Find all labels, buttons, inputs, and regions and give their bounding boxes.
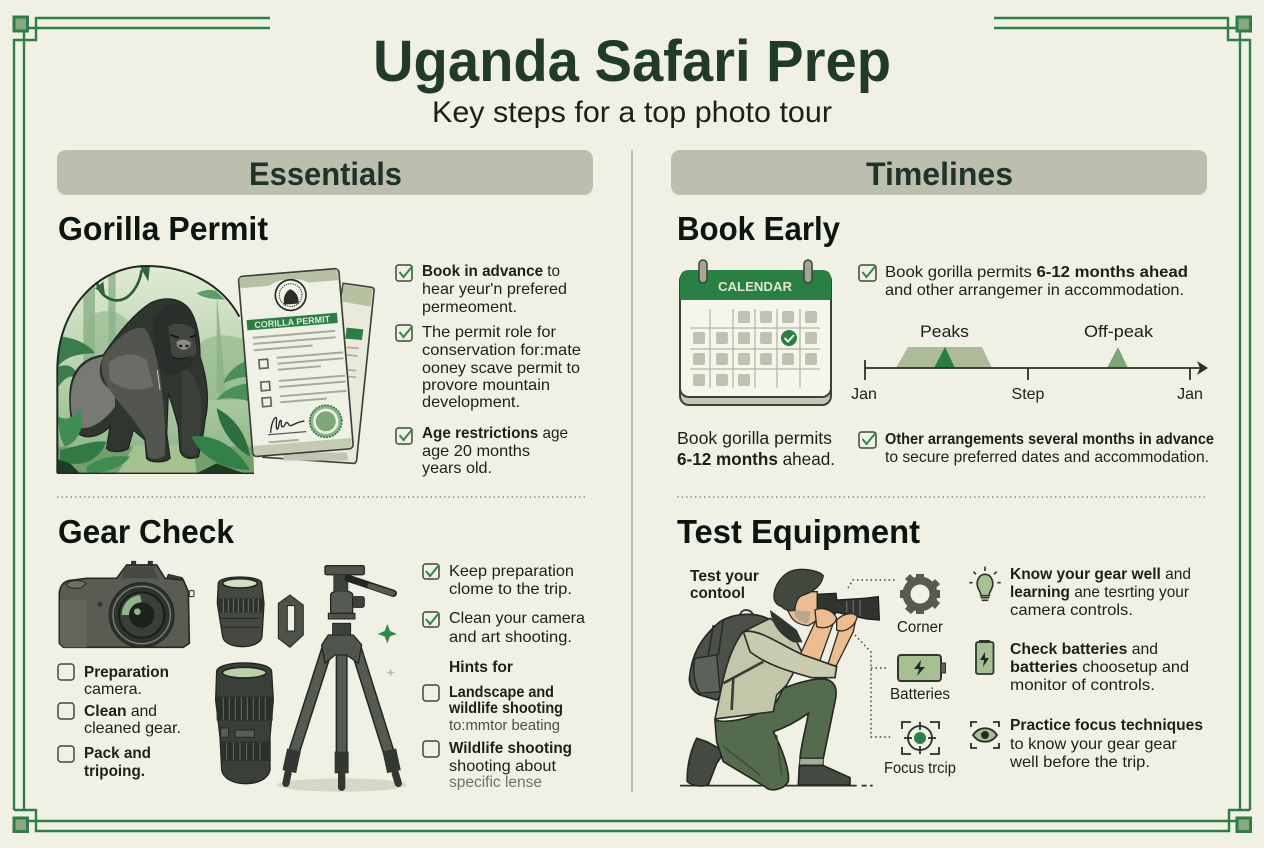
icon: focus target [902, 722, 939, 754]
sleeve [743, 631, 837, 678]
title: Uganda Safari Prep [373, 29, 891, 94]
item: permit role [396, 324, 581, 411]
checklist: gorilla permit [396, 263, 581, 477]
item: age restrictions: Age restrictions age [422, 425, 568, 442]
tip: know your gear: camera controls. [1010, 602, 1133, 619]
far forearm [827, 615, 857, 668]
label: corner: Corner [897, 619, 943, 636]
tip: check batteries: Check batteries and [1010, 641, 1158, 658]
item: clean gear [58, 703, 181, 737]
text: calendar caption: 6-12 months ahead. [677, 449, 835, 469]
illustration: gorilla in jungle arch [50, 260, 374, 480]
item: pack tripod [58, 745, 151, 780]
text: test your control: Test your [690, 568, 759, 585]
icon: calendar: CALENDAR [718, 279, 793, 294]
icon: battery [898, 655, 946, 681]
icon: grey sparkle [386, 668, 395, 677]
icon: battery upright [976, 640, 994, 674]
icon: green sparkle [378, 624, 397, 643]
item: pack tripod: tripoing. [84, 763, 145, 780]
text: book gorilla permits [859, 264, 1188, 299]
strap [770, 610, 803, 642]
chart: season timeline [851, 322, 1208, 403]
item: landscape and wildlife: wildlife shooting [448, 700, 563, 717]
icon: lens hood [278, 595, 303, 647]
tip: check batteries: batteries choosetup and [1010, 659, 1189, 676]
item: wildlife shooting: shooting about [449, 758, 557, 775]
text: other arrangements: to secure preferred dates and accommodation. [885, 449, 1209, 466]
tip: practice focus: to know your gear gear [1010, 736, 1178, 753]
text: book gorilla permits: and other arrangemer in accommodation. [885, 282, 1184, 299]
near forearm [800, 615, 835, 665]
chart: season timeline: Jan [851, 386, 877, 403]
head [785, 592, 817, 626]
tips: test equipment [969, 566, 1203, 771]
icon: short lens [217, 577, 264, 647]
tip: know your gear: learning ane tesrting your [1010, 584, 1190, 601]
front permit sheet [238, 268, 353, 457]
item: clean gear: Clean and [84, 703, 157, 720]
foreground leaves [58, 408, 82, 447]
item: permit role: provore mountain [422, 377, 550, 394]
gorilla body [70, 299, 207, 462]
item: preparation camera [58, 664, 169, 698]
front permit sheet: CORILLA PERMIT [254, 314, 331, 330]
item: wildlife shooting: Wildlife shooting [449, 740, 572, 757]
checklist: gear left [58, 664, 181, 780]
back permit sheet [263, 283, 374, 463]
torso [715, 618, 803, 719]
icon: telephoto lens [216, 663, 273, 784]
illustration: camera, lenses and tripod [59, 561, 407, 792]
icon: eye focus [971, 722, 999, 748]
item: permit role: ooney scave permit to [422, 360, 580, 377]
panel: essentials header: Essentials [249, 156, 402, 192]
checklist: gear right [423, 563, 585, 791]
tip: practice focus [1009, 717, 1203, 771]
text: test your control [690, 568, 759, 602]
tip: know your gear [1010, 566, 1191, 619]
item: clean gear: cleaned gear. [84, 720, 181, 737]
item: permit role: conservation for:mate [422, 342, 581, 359]
text: test your control: contool [690, 585, 745, 602]
panel: timelines header [671, 150, 1207, 195]
item: book in advance: Book in advance to [422, 263, 560, 280]
column divider [631, 150, 633, 792]
panel: timelines header: Timelines [866, 156, 1013, 192]
item: pack tripod: Pack and [84, 745, 151, 762]
item: clean your camera [423, 610, 585, 646]
backpack [689, 614, 767, 700]
item: preparation camera: Preparation [84, 664, 169, 681]
rear boot [687, 738, 725, 786]
label: batteries: Batteries [890, 686, 950, 703]
text: other arrangements [859, 431, 1214, 466]
tip: check batteries [1010, 641, 1189, 694]
item: clean your camera: Clean your camera [449, 610, 585, 627]
icon: calendar [680, 260, 831, 405]
tip: practice focus: Practice focus techniques [1010, 717, 1203, 734]
heading: gorilla permit: Gorilla Permit [58, 210, 268, 247]
item: clean your camera: and art shooting. [449, 629, 572, 646]
item: permit role: The permit role for [422, 324, 557, 341]
item: book in advance: permeoment. [422, 299, 517, 316]
item: landscape and wildlife: to:mmtor beating [449, 717, 560, 734]
text: calendar caption [677, 428, 835, 469]
item: book in advance: hear yeur'n prefered [422, 281, 567, 298]
item: age restrictions: years old. [422, 460, 492, 477]
text: other arrangements: Other arrangements several months in advance [885, 431, 1214, 448]
icon: tripod [277, 566, 407, 792]
item: book in advance [396, 263, 567, 316]
panel: essentials header [57, 150, 593, 195]
item: landscape and wildlife: Landscape and [449, 684, 554, 701]
chart: season timeline: Jan [1177, 386, 1203, 403]
item: permit role: development. [422, 394, 520, 411]
item: age restrictions: age 20 months [422, 443, 530, 460]
text: calendar caption: Book gorilla permits [677, 428, 832, 448]
item: landscape and wildlife [423, 684, 563, 734]
camera [817, 593, 879, 620]
item: preparation camera: camera. [84, 681, 142, 698]
chart: season timeline: Peaks [920, 322, 969, 341]
tip: check batteries: monitor of controls. [1010, 677, 1155, 694]
text: hints for: Hints for [449, 659, 513, 676]
subtitle: Key steps for a top photo tour [432, 96, 832, 129]
icon: dslr camera [59, 561, 194, 647]
icon: gear control [900, 574, 940, 614]
tip: practice focus: well before the trip. [1009, 754, 1150, 771]
tip: know your gear: Know your gear well and [1010, 566, 1191, 583]
connector lines [848, 580, 896, 737]
chart: season timeline: Step [1012, 386, 1045, 403]
text: book gorilla permits: Book gorilla permits 6-12 months ahead [885, 264, 1188, 281]
illustration: kneeling photographer [680, 569, 879, 790]
icon: light bulb [969, 567, 1001, 600]
item: keep preparation: clome to the trip. [449, 581, 572, 598]
heading: test equipment: Test Equipment [677, 513, 920, 550]
item: keep preparation: Keep preparation [449, 563, 574, 580]
item: age restrictions [396, 425, 568, 477]
item: wildlife shooting: specific lense [449, 774, 542, 791]
heading: book early: Book Early [677, 210, 841, 247]
heading: gear check: Gear Check [58, 513, 235, 550]
trousers [715, 679, 836, 790]
item: keep preparation [423, 563, 574, 598]
chart: season timeline: Off-peak [1084, 322, 1154, 341]
item: wildlife shooting [423, 740, 572, 791]
label: focus trip: Focus trcip [884, 760, 956, 777]
